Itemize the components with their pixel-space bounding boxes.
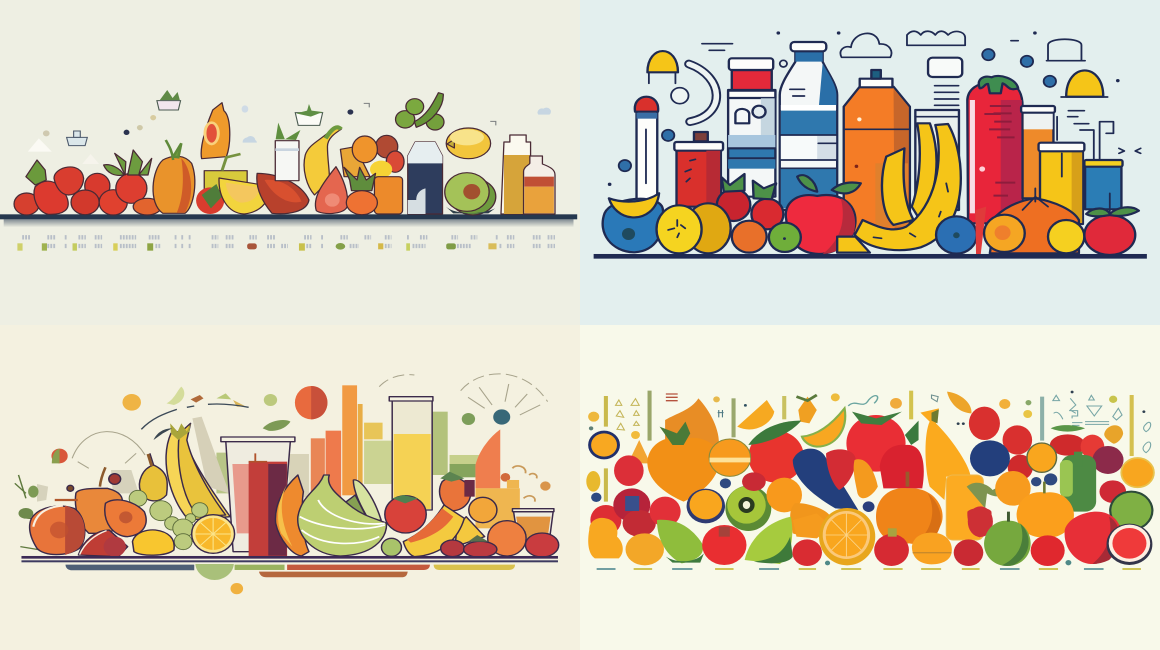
yellow box and melon wedge [196, 154, 269, 214]
panel: top-left fruit shelf [0, 0, 580, 325]
panel: top-right bottles and fruit [580, 0, 1160, 325]
orange jar with fruit cluster [340, 135, 404, 215]
yellow domes [647, 51, 1108, 97]
lower row fruits [657, 508, 1065, 566]
kiwi [725, 486, 771, 531]
papaya [201, 103, 230, 159]
grain jar and small bottle [501, 135, 555, 214]
lemon half [132, 530, 174, 555]
yellow jar [1039, 143, 1084, 224]
pea pod [396, 93, 444, 130]
line doodles [608, 31, 1141, 186]
white and blue canister [728, 58, 775, 197]
bananas [837, 123, 961, 253]
red tall bottle [967, 76, 1023, 223]
blue bowl [603, 193, 663, 252]
strawberries behind apple [717, 174, 783, 229]
shelf [0, 214, 577, 227]
lower shelf [21, 556, 558, 562]
white lid and pale jar [915, 58, 962, 210]
left side small fruit [586, 431, 681, 565]
red apple [786, 175, 861, 254]
blue dots [619, 49, 1056, 171]
mid berries and peach [742, 421, 924, 535]
orange banana [275, 475, 309, 556]
bottom right berries and jar [441, 509, 559, 557]
blueberry bunch [793, 440, 1010, 512]
left fruit group [15, 467, 146, 557]
floating small icons [28, 90, 551, 164]
shelf [594, 254, 1147, 259]
orange jar right [1021, 106, 1055, 198]
orange bottle [844, 70, 910, 233]
back row fruit [628, 392, 1123, 497]
vertical bars and small icons [588, 391, 1151, 502]
orange slices row [687, 439, 1154, 523]
orange slice [192, 515, 235, 553]
big orange apple [647, 422, 720, 502]
pumpkin [153, 140, 195, 213]
pale grape cluster [129, 490, 208, 550]
red jar [674, 132, 723, 207]
banana [304, 127, 341, 195]
large blue bottle [780, 42, 837, 210]
bar chart backdrop [192, 385, 520, 528]
right big fruit [968, 480, 1154, 565]
yellow pear [139, 453, 167, 501]
blue jar [1084, 160, 1123, 209]
bottom dashes [597, 560, 1141, 569]
red juice glass [221, 437, 295, 556]
strawberry and citrus group [381, 472, 497, 557]
white carton with leaves [275, 123, 300, 181]
small orange and lime [732, 221, 801, 253]
panel: bottom-right fruit mosaic [580, 325, 1160, 650]
microscope arc [671, 64, 716, 122]
test tube [635, 97, 658, 203]
red melon [257, 173, 309, 214]
fruit shadows [37, 470, 139, 502]
tall banana and bottle [920, 408, 1096, 540]
orange fruit with spiral [975, 188, 1084, 254]
panel: bottom-left fruit and drinks [0, 325, 580, 650]
green banana bunch [298, 475, 387, 556]
orange apple centre [876, 472, 943, 544]
bananas bunch [154, 423, 230, 520]
colored bars under shelf [65, 564, 515, 580]
tall yellow glass [389, 397, 433, 510]
decorative circles and leaves [51, 386, 551, 594]
placeholder tick rows [17, 237, 555, 251]
green avocado half [445, 173, 496, 215]
yellow fruit [446, 128, 491, 159]
blueberry [936, 216, 977, 254]
yellow sliced fruit [657, 203, 731, 253]
fig slice [315, 167, 348, 214]
bottom right red fruit [1084, 193, 1139, 255]
strawberries and tomatoes group [14, 150, 161, 215]
navy bottle [408, 142, 443, 214]
line arcs [72, 374, 548, 502]
